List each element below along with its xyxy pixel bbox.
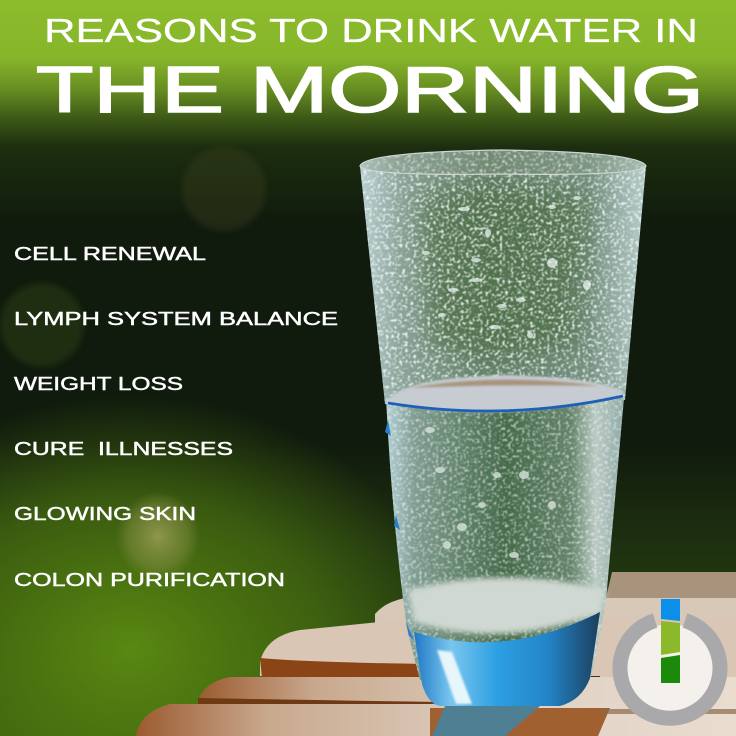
logo (620, 599, 720, 718)
logo: dark green bar (661, 655, 680, 683)
glass: condensation texture (360, 150, 646, 411)
reason 5: GLOWING SKIN (14, 504, 196, 524)
glass: rim (360, 150, 646, 174)
reason 2: LYMPH SYSTEM BALANCE (14, 309, 338, 329)
glass: upper empty section (360, 150, 646, 411)
reason 6: COLON PURIFICATION (14, 570, 285, 590)
glass: blue base (414, 612, 600, 706)
glass: meniscus band above water line (387, 375, 624, 412)
glass: large droplets (422, 196, 591, 338)
reason 3: WEIGHT LOSS (14, 374, 183, 394)
title (36, 12, 704, 126)
table slat: third (260, 618, 736, 684)
water glass (360, 150, 646, 736)
logo: grey ring (620, 620, 720, 718)
table slat: back (606, 572, 736, 598)
title line 1: REASONS TO DRINK WATER IN (44, 12, 698, 49)
reason 1: CELL RENEWAL (14, 244, 206, 264)
glass: left blue edge drops (385, 420, 414, 640)
logo: light green bar (661, 621, 680, 655)
logo: blue bar (661, 599, 680, 621)
table slat: fourth (198, 677, 736, 716)
reason 4: CURE ILLNESSES (14, 439, 233, 459)
glass: water body (386, 398, 624, 680)
glass: lower pale band (408, 578, 606, 634)
title line 2: THE MORNING (36, 53, 704, 126)
glass: submerged droplets (425, 427, 556, 558)
wooden table (136, 572, 736, 736)
glass: blue water line (388, 396, 623, 411)
table slat: front (136, 704, 736, 736)
logo: white centre (626, 624, 714, 712)
glass: reflection on table (432, 706, 540, 736)
list of reasons (14, 244, 338, 590)
glass: base highlight (437, 650, 472, 704)
table slat: second (375, 598, 736, 630)
